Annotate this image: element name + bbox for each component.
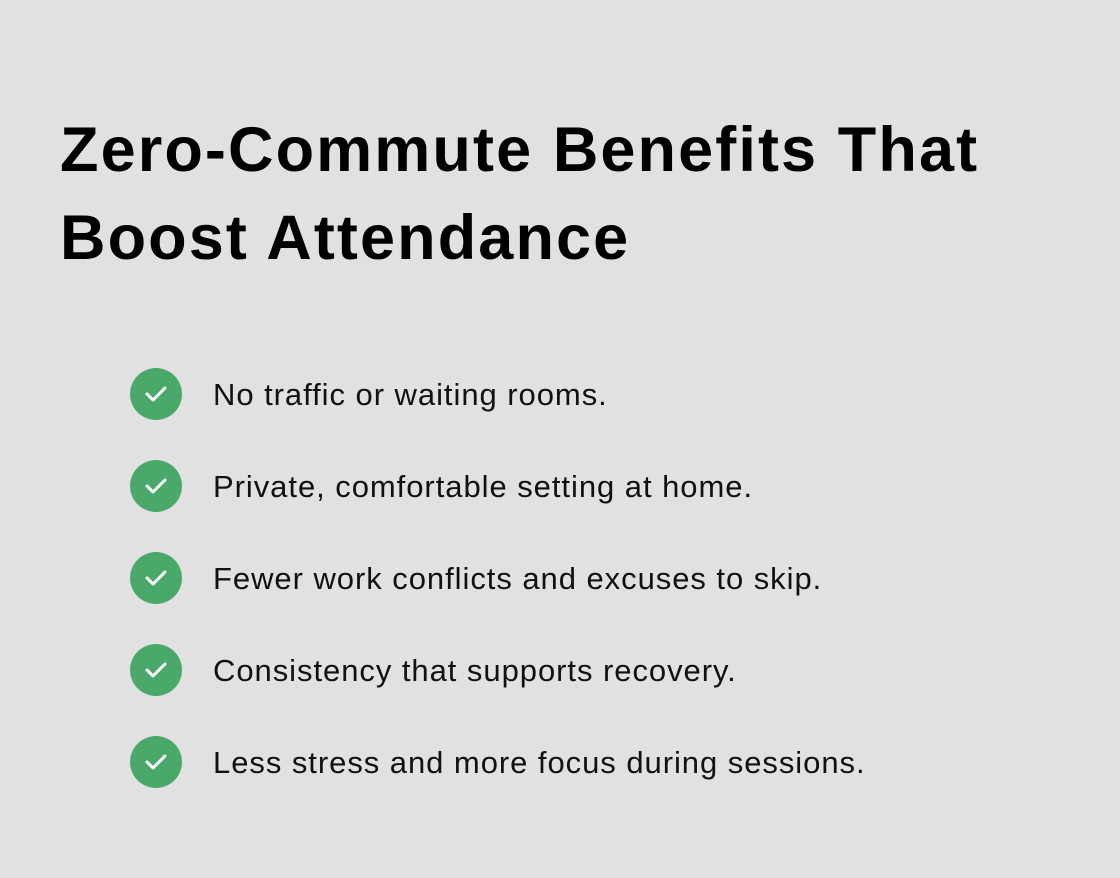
text: Consistency that supports recovery. <box>213 653 737 688</box>
list item 3 <box>130 552 822 604</box>
text: No traffic or waiting rooms. <box>213 377 608 412</box>
icon: check <box>130 368 182 420</box>
list item 4 <box>130 644 737 696</box>
icon: check <box>130 736 182 788</box>
title: Zero-Commute Benefits That <box>60 115 979 185</box>
title: Boost Attendance <box>60 203 630 273</box>
icon: check <box>130 460 182 512</box>
list item 1 <box>130 368 608 420</box>
title <box>60 115 979 273</box>
icon: check <box>130 644 182 696</box>
text: Less stress and more focus during sessions. <box>213 745 866 780</box>
icon: check <box>130 552 182 604</box>
list item 5 <box>130 736 866 788</box>
list item 2 <box>130 460 753 512</box>
text: Fewer work conflicts and excuses to skip. <box>213 561 822 596</box>
text: Private, comfortable setting at home. <box>213 469 753 504</box>
